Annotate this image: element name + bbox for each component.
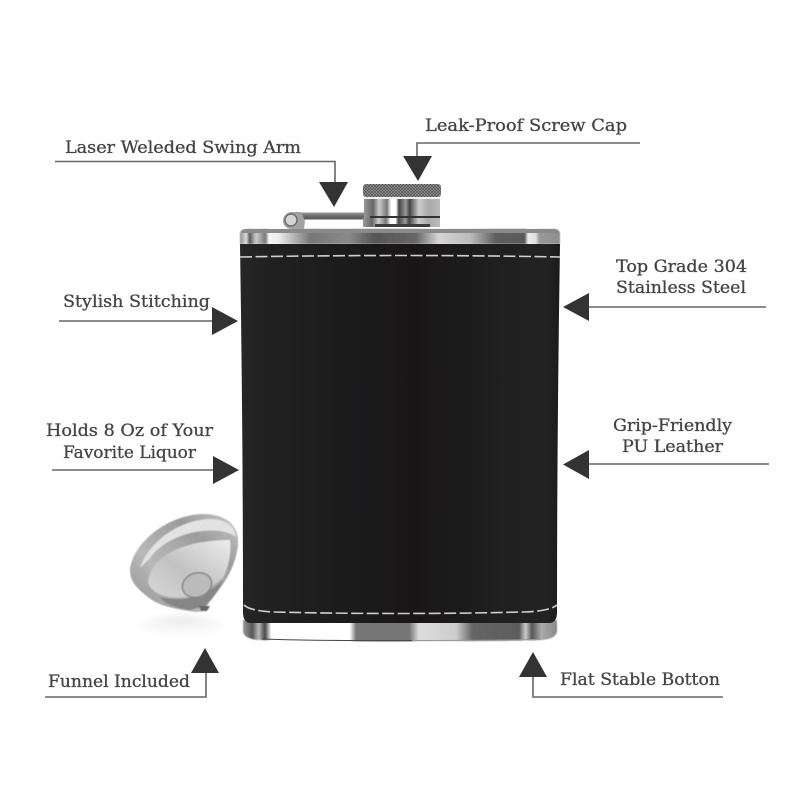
callout: top grade steel [563, 257, 766, 321]
stitching bottom [244, 605, 557, 614]
callout: leak-proof screw cap [403, 116, 640, 181]
callout: stylish stitching: Stylish Stitching [63, 292, 210, 312]
bottom metal band [243, 620, 557, 642]
callout: funnel included: Funnel Included [48, 672, 190, 692]
funnel body [130, 514, 238, 612]
callout: grip-friendly leather: Grip-Friendly [613, 416, 732, 436]
callout: holds 8 oz: Favorite Liquor [63, 443, 197, 463]
screw cap [363, 184, 441, 227]
callout: laser welded swing arm: Laser Weleded Swing Arm [65, 138, 301, 158]
callout: holds 8 oz [46, 421, 239, 484]
top metal band [240, 229, 560, 244]
callout: leak-proof screw cap: Leak-Proof Screw Cap [425, 116, 627, 136]
callout: flat stable bottom [519, 652, 723, 697]
callout: top grade steel: Stainless Steel [616, 278, 746, 298]
swing arm [283, 212, 370, 229]
callout: holds 8 oz: Holds 8 Oz of Your [46, 421, 214, 441]
funnel reflection [140, 615, 224, 639]
callout: top grade steel: Top Grade 304 [616, 257, 747, 277]
funnel [130, 514, 238, 639]
flask [240, 184, 560, 642]
callout: laser welded swing arm [55, 138, 348, 207]
leather wrap [240, 244, 560, 623]
stitching top [240, 256, 560, 257]
callout: grip-friendly leather: PU Leather [622, 437, 724, 457]
callout: stylish stitching [59, 292, 238, 335]
callout: flat stable bottom: Flat Stable Botton [560, 670, 720, 690]
callout: grip-friendly leather [563, 416, 769, 479]
callout: funnel included [45, 648, 219, 697]
